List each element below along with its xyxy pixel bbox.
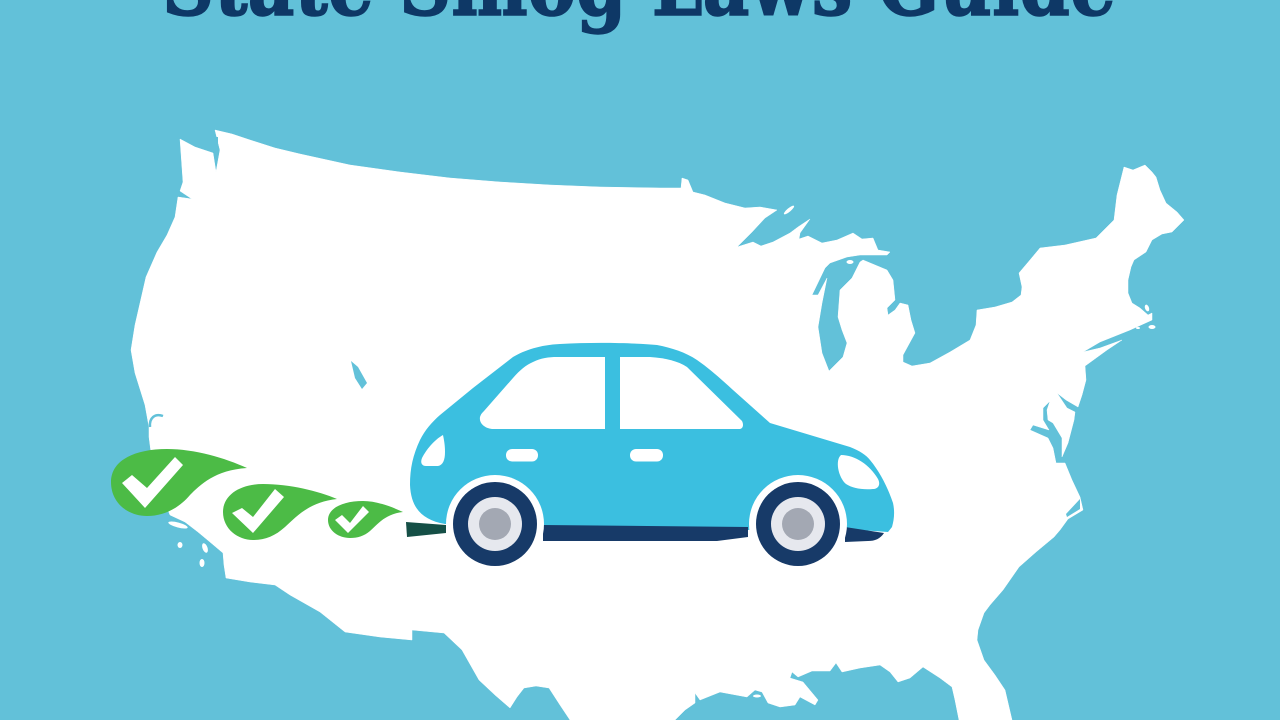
San Francisco Bay (150, 415, 163, 427)
rear wheel (446, 475, 544, 573)
door handle front (630, 449, 663, 462)
map: contiguous United States (131, 130, 1184, 720)
icon: small green leaf with check (328, 501, 403, 538)
rear window (480, 357, 605, 429)
door handle rear (506, 449, 538, 462)
offshore islands (168, 204, 1155, 698)
icon: medium green leaf with check (223, 484, 337, 540)
front window (620, 357, 743, 429)
Great Salt Lake (351, 361, 367, 389)
car (410, 343, 894, 573)
front bumper (845, 527, 884, 542)
Outer Banks lagoon (1066, 499, 1080, 517)
car body (410, 343, 894, 532)
tail light (421, 435, 445, 466)
icon: large green leaf with check (111, 449, 247, 516)
sill (543, 525, 748, 541)
headlight (838, 455, 879, 489)
Washington inlet (213, 137, 218, 143)
front wheel (749, 475, 847, 573)
exhaust pipe (406, 522, 446, 537)
